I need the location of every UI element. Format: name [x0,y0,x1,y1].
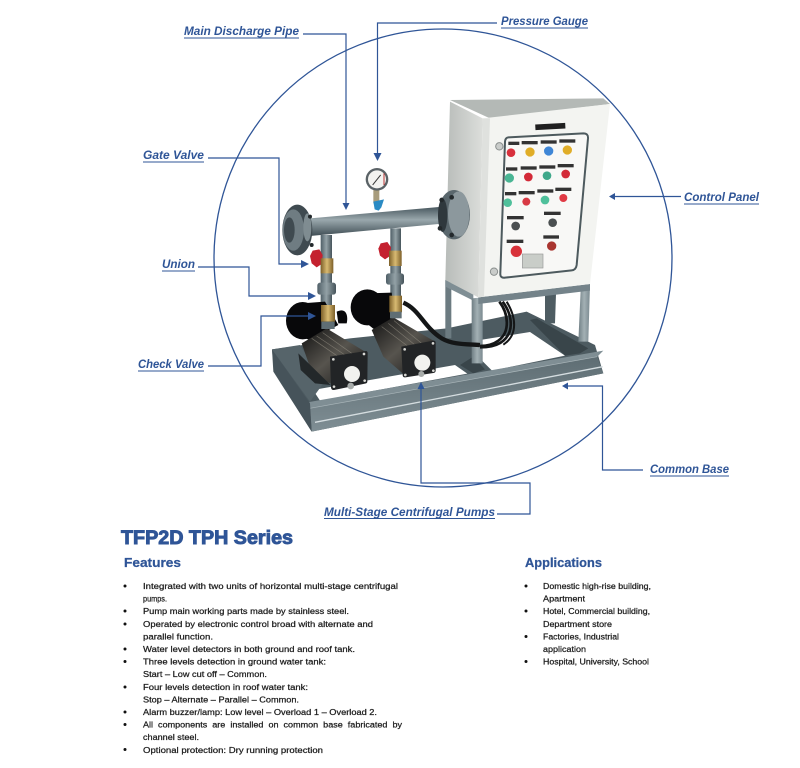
callout: Check Valve [138,312,316,371]
text block: features list: Water level detectors in both ground and roof tank. [143,644,355,654]
callout: Union [162,257,316,300]
unions [317,273,404,295]
callout: Pressure Gauge [374,14,588,161]
callout: Common Base: Common Base [650,462,729,476]
callout: Multi-Stage Centrifugal Pumps [324,382,530,519]
callout: Common Base [562,382,729,476]
text block: features list: Four levels detection in roof water tank: [143,682,308,692]
text block: features list: parallel function. [143,631,213,641]
text block: features list: All components are installed on common base fabricated by [143,720,403,730]
cabinet body [445,98,610,297]
text block: features list [124,581,403,755]
text block: features list: Start – Low cut off – Common. [143,669,267,679]
discharge pipe risers [321,228,401,328]
text block: applications list [524,581,651,667]
gate valves [310,242,402,273]
text block: features list: Pump main working parts made by stainless steel. [143,606,349,616]
callout: Main Discharge Pipe [184,24,350,210]
text block: applications list: application [543,644,586,654]
text block: features list: Stop – Alternate – Parallel – Common. [143,694,299,704]
text block: features list: Alarm buzzer/lamp: Low level – Overload 1 – Overload 2. [143,707,377,717]
heading: Applications: Applications [525,555,602,570]
callout: Union: Union [162,257,195,271]
motors [286,289,395,340]
text block: applications list: Domestic high-rise building, [543,581,651,591]
callout: Pressure Gauge: Pressure Gauge [501,14,588,28]
text block: applications list: Hotel, Commercial building, [543,606,650,616]
control panel window [490,123,588,278]
callout: Check Valve: Check Valve [138,357,204,371]
callout: Main Discharge Pipe: Main Discharge Pipe [184,24,299,38]
text block: applications list: Factories, Industrial [543,631,619,641]
text block: applications list: Department store [543,619,612,629]
callout: Multi-Stage Centrifugal Pumps: Multi-Stage Centrifugal Pumps [324,505,495,519]
text block: applications list: Apartment [543,594,586,604]
text block: features list: Three levels detection in ground water tank: [143,657,326,667]
text block: features list: Integrated with two units of horizontal multi-stage centrifugal [143,581,398,591]
callout: Control Panel [609,190,760,204]
callout: Gate Valve [143,148,309,268]
title: TFP2D TPH Series [121,528,293,549]
callout: Gate Valve: Gate Valve [143,148,204,162]
cabinet stand [445,280,590,363]
text block: features list: pumps. [143,594,167,604]
pressure gauge [366,168,388,211]
text block: features list: channel steel. [143,732,199,742]
text block: applications list: Hospital, University, School [543,657,649,667]
circle outline [214,29,672,487]
callout: Control Panel: Control Panel [684,190,760,204]
pump set illustration [272,98,610,432]
main discharge pipe [282,190,470,255]
control cables [403,302,514,347]
common base frame [272,312,603,432]
right pump [372,296,436,377]
text block: features list: Operated by electronic control broad with alternate and [143,619,373,629]
heading: Features: Features [124,555,181,570]
left pump [298,305,368,390]
text block: features list: Optional protection: Dry running protection [143,745,323,755]
